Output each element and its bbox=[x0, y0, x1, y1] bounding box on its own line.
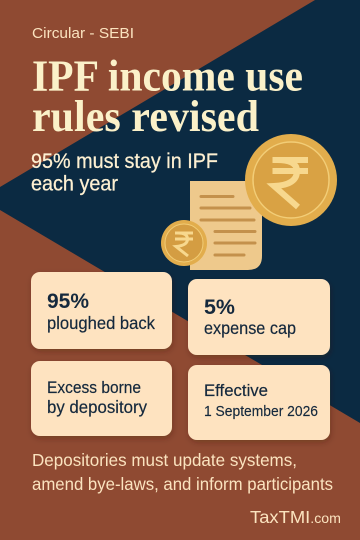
title: rules revised bbox=[32, 92, 259, 141]
card: effective date: Effective bbox=[204, 381, 268, 400]
card: effective date: 1 September 2026 bbox=[204, 404, 318, 420]
icon: large rupee coin bbox=[245, 134, 337, 226]
icon: small rupee coin bbox=[161, 220, 207, 266]
eyebrow: Circular - SEBI: Circular - SEBI bbox=[32, 25, 134, 42]
card: 95% ploughed back: ploughed back bbox=[47, 313, 155, 333]
card: effective date bbox=[188, 365, 330, 440]
card: excess borne by depository: Excess borne bbox=[47, 378, 141, 397]
subtitle: 95% must stay in IPF bbox=[31, 150, 218, 173]
title bbox=[32, 52, 303, 141]
card: 5% expense cap: 5% bbox=[204, 296, 235, 319]
footer note bbox=[32, 450, 333, 494]
subtitle: each year bbox=[31, 172, 118, 196]
card: 95% ploughed back: 95% bbox=[47, 290, 89, 313]
footer note: amend bye-laws, and inform participants bbox=[32, 474, 333, 494]
icon: document bbox=[190, 181, 262, 270]
title: IPF income use bbox=[32, 52, 303, 100]
card: excess borne by depository: by depository bbox=[47, 397, 147, 417]
card: 5% expense cap bbox=[188, 279, 330, 355]
background: navy diagonal panel bbox=[0, 0, 360, 423]
card: excess borne by depository bbox=[31, 361, 172, 436]
card: 5% expense cap: expense cap bbox=[204, 318, 296, 338]
footer note: Depositories must update systems, bbox=[32, 450, 297, 470]
card: 95% ploughed back bbox=[31, 272, 172, 349]
brand: TaxTMI.com: TaxTMI.com bbox=[250, 507, 341, 527]
subtitle bbox=[31, 150, 218, 196]
